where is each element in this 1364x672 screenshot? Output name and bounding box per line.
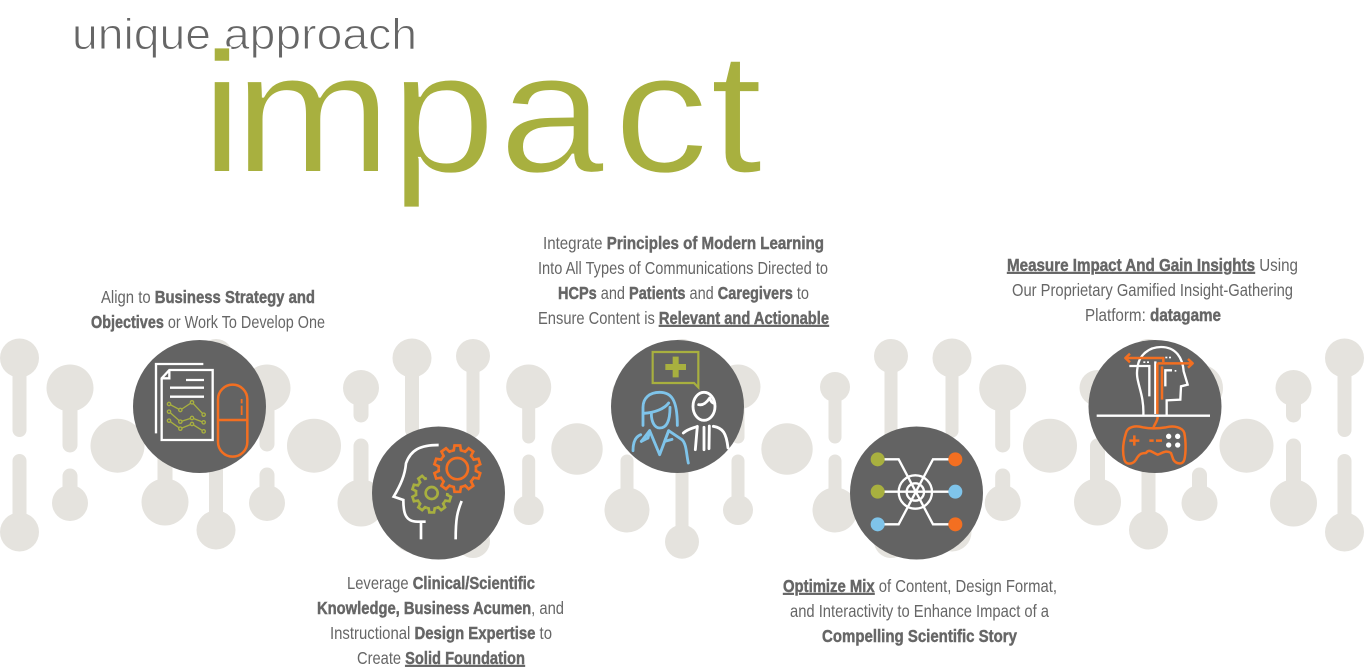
text block: optimize mix: and Interactivity to Enhance Impact of a [790, 601, 1049, 621]
step 1: business strategy circle icon [133, 340, 266, 473]
text block: leverage knowledge: Leverage Clinical/Scientific [347, 573, 535, 593]
subtitle: unique approach: unique approach [72, 10, 417, 59]
text block: leverage knowledge: Knowledge, Business Acumen, and [317, 598, 564, 618]
text block: optimize mix: Compelling Scientific Story [822, 626, 1017, 646]
text block: integrate modern learning [538, 233, 829, 328]
step 4: optimize mix circle icon [850, 426, 983, 560]
text block: measure impact [1007, 255, 1298, 325]
text block: measure impact: Measure Impact And Gain Insights Using [1007, 255, 1298, 275]
step 5: datagame circle icon [1088, 340, 1222, 473]
text block: align to business strategy [91, 287, 325, 332]
icon: document and pill [156, 364, 247, 457]
text block: integrate modern learning: Integrate Principles of Modern Learning [543, 233, 824, 253]
icon: hub network [871, 452, 962, 531]
text block: leverage knowledge [317, 573, 564, 668]
background pattern: molecular pins [0, 338, 1364, 559]
text block: align to business strategy: Align to Business Strategy and [101, 287, 315, 307]
text block: leverage knowledge: Instructional Design Expertise to [330, 623, 552, 643]
title: impact: impact [201, 17, 763, 209]
text block: optimize mix: Optimize Mix of Content, Design Format, [783, 576, 1057, 596]
step 2: knowledge circle icon [372, 426, 505, 560]
text block: align to business strategy: Objectives or Work To Develop One [91, 312, 325, 332]
text block: integrate modern learning: Into All Types of Communications Directed to [538, 258, 828, 278]
text block: integrate modern learning: HCPs and Patients and Caregivers to [558, 283, 809, 303]
icon: head with gears [394, 445, 481, 539]
step 3: modern learning circle icon [611, 340, 744, 473]
text block: integrate modern learning: Ensure Content is Relevant and Actionable [538, 308, 829, 328]
text block: optimize mix [783, 576, 1057, 646]
text block: measure impact: Platform: datagame [1085, 305, 1221, 325]
text block: measure impact: Our Proprietary Gamified Insight-Gathering [1012, 280, 1293, 300]
text block: leverage knowledge: Create Solid Foundation [357, 648, 525, 668]
icon: clinician and patient with speech bubble [633, 352, 728, 463]
icon: head and game controller [1097, 347, 1210, 464]
